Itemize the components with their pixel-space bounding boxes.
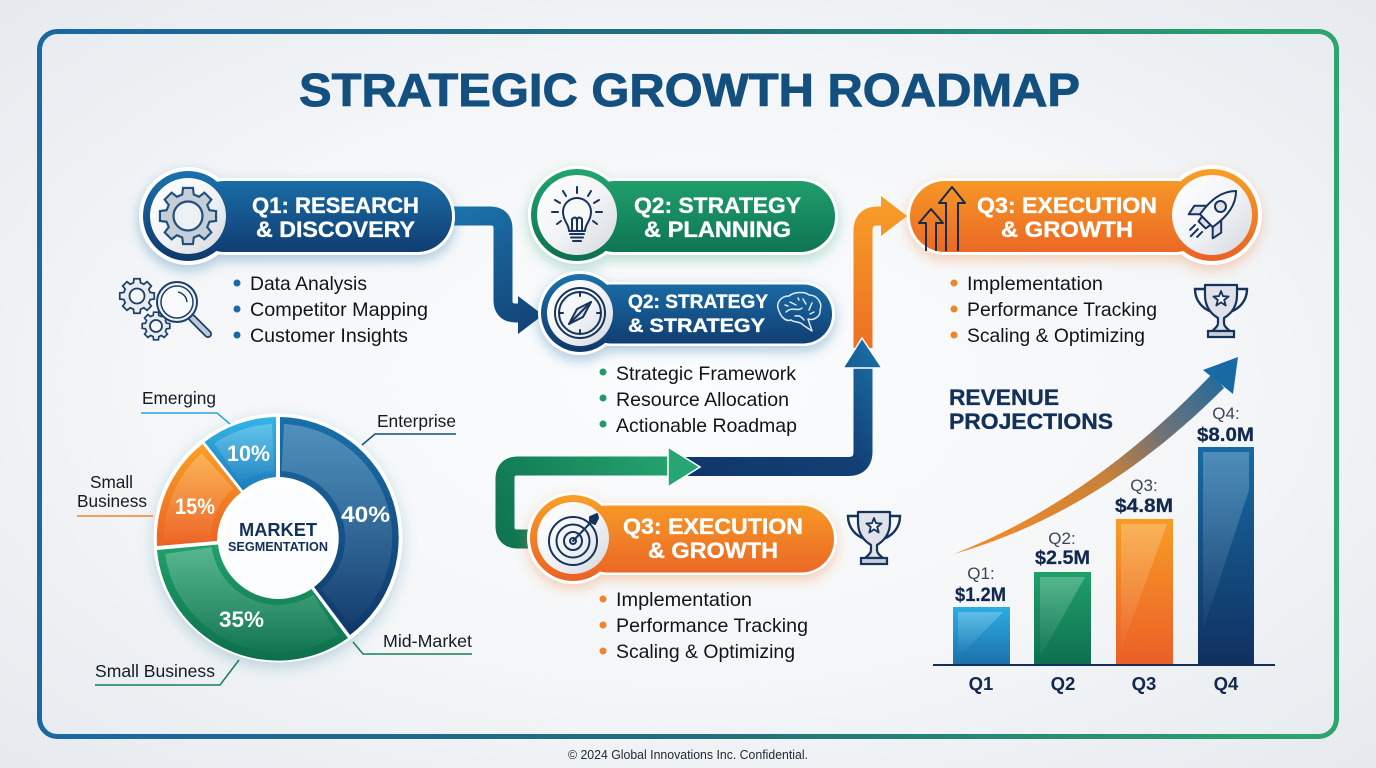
pill fill: Q2 strategy xyxy=(541,274,832,352)
segment: small business 15% xyxy=(157,444,241,546)
icon: rocket xyxy=(1177,178,1249,250)
bullet list: Q2: Actionable Roadmap xyxy=(616,415,797,437)
heading: Q3 right xyxy=(977,193,1157,242)
panel: Q3 execution, centre column xyxy=(527,492,900,663)
centre label: MARKET xyxy=(239,520,317,540)
percentages: 10% xyxy=(227,441,270,466)
pill fill: Q1 xyxy=(143,171,452,261)
pill fill: Q3 right xyxy=(910,169,1258,261)
label: Mid-Market: Mid-Market xyxy=(383,631,472,651)
pill fill: Q3 centre xyxy=(530,495,834,581)
heading: Q3 right: Q3: EXECUTION xyxy=(977,193,1157,218)
bullet list: Q3 right: Scaling & Optimizing xyxy=(967,325,1145,347)
panel: Q1 research and discovery xyxy=(120,167,455,347)
footer copyright: © 2024 Global Innovations Inc. Confidential. xyxy=(568,748,808,762)
label: Emerging xyxy=(141,388,230,424)
panel: Q2 strategy and planning pill xyxy=(528,166,838,264)
donut hole xyxy=(222,485,334,597)
heading: Q2 strategy xyxy=(628,291,768,337)
axis labels: Q1 xyxy=(969,673,993,694)
pill outline: Q3 centre xyxy=(527,492,837,584)
heading: Q2 strategy: Q2: STRATEGY xyxy=(628,291,768,313)
percentages xyxy=(175,441,390,632)
icon: growth arrows xyxy=(919,187,965,251)
label: Small Business orange xyxy=(77,472,153,516)
axis labels xyxy=(969,673,1239,694)
label: Mid-Market xyxy=(353,631,472,654)
pill outline: Q2 strategy xyxy=(538,271,835,355)
bullet list: Q3 centre: Scaling & Optimizing xyxy=(616,641,795,663)
bar: Q2 xyxy=(1034,529,1091,665)
percentages: 15% xyxy=(175,494,215,519)
arrow: navy rising connector xyxy=(685,338,882,466)
segment highlights xyxy=(164,424,392,652)
arrow: Q1 to Q2 xyxy=(450,216,543,334)
axis labels: Q3 xyxy=(1132,673,1156,694)
icon: trophy right xyxy=(1195,285,1247,337)
bullet list: Q1: Data Analysis xyxy=(250,273,367,295)
heading: Q1 xyxy=(252,193,419,242)
bullet list: Q3 right: Implementation xyxy=(967,273,1103,295)
label: Enterprise: Enterprise xyxy=(377,411,456,431)
chart heading xyxy=(949,385,1113,434)
segment: emerging 10% xyxy=(204,417,276,490)
bullet list: Q1 xyxy=(234,273,428,347)
icon: compass xyxy=(555,288,605,338)
pill fill: Q2 planning xyxy=(531,169,835,261)
bullet list: Q3 centre: Implementation xyxy=(616,589,752,611)
bar: Q3: $4.8M xyxy=(1115,496,1173,517)
bullet list: Q2: Strategic Framework xyxy=(616,363,796,385)
centre label: SEGMENTATION xyxy=(228,540,328,554)
segment: enterprise 40% xyxy=(280,417,399,635)
heading: Q1: Q1: RESEARCH xyxy=(252,193,419,218)
bar: Q4 xyxy=(1197,404,1254,665)
bullet list: Q3 right xyxy=(950,273,1157,347)
heading: Q2 strategy: & STRATEGY xyxy=(628,315,765,337)
bar: Q3 xyxy=(1115,476,1173,665)
heading: Q3 centre: Q3: EXECUTION xyxy=(623,514,803,539)
bullet list: Q1: Competitor Mapping xyxy=(250,299,428,321)
label: Small Business orange: Small xyxy=(90,472,133,492)
chart heading: REVENUE xyxy=(949,385,1059,410)
percentages: 35% xyxy=(219,607,264,632)
chart heading: PROJECTIONS xyxy=(949,409,1113,434)
bar: Q4: Q4: xyxy=(1212,404,1240,423)
icon: light bulb xyxy=(552,187,602,241)
bar: Q1 xyxy=(953,564,1010,665)
bullet list: Q2 xyxy=(600,363,797,437)
label: Small Business green xyxy=(95,660,239,685)
axis labels: Q4 xyxy=(1214,673,1239,694)
bullet list: Q3 centre: Performance Tracking xyxy=(616,615,808,637)
bullet list: Q3 centre xyxy=(600,589,808,663)
title: STRATEGIC GROWTH ROADMAP xyxy=(299,64,1080,116)
label: Emerging: Emerging xyxy=(142,388,216,408)
arrow: green connector xyxy=(505,447,700,539)
heading: Q3 centre xyxy=(623,514,803,563)
donut chart: market segmentation xyxy=(77,388,472,685)
icon: trophy centre xyxy=(848,512,900,564)
arrow: orange up to Q3 execution xyxy=(863,196,907,348)
growth swoosh arrow xyxy=(954,357,1238,554)
label: Small Business green: Small Business xyxy=(95,661,215,681)
bar: Q1: Q1: xyxy=(967,564,995,583)
icon: target with arrow xyxy=(549,514,598,565)
bar chart: revenue projections xyxy=(933,357,1275,694)
heading: Q1: & DISCOVERY xyxy=(256,217,415,242)
percentages: 40% xyxy=(341,502,390,527)
bar: Q3: Q3: xyxy=(1130,476,1158,495)
centre label xyxy=(228,520,328,554)
heading: Q2 planning: Q2: STRATEGY xyxy=(634,193,801,218)
heading: Q2 planning xyxy=(634,193,801,242)
bar: Q2: Q2: xyxy=(1048,529,1076,548)
bar: Q1: $1.2M xyxy=(955,585,1006,606)
icon: brain xyxy=(778,292,821,331)
pill: Q1 white outline xyxy=(139,167,455,265)
bar: Q4: $8.0M xyxy=(1197,425,1254,446)
pill outline: Q3 right xyxy=(907,165,1262,265)
label: Small Business orange: Business xyxy=(77,491,147,511)
heading: Q3 right: & GROWTH xyxy=(1001,217,1133,242)
axis labels: Q2 xyxy=(1051,673,1075,694)
label: Enterprise xyxy=(362,411,456,445)
bullet list: Q1: Customer Insights xyxy=(250,325,408,347)
donut base with shadow xyxy=(154,414,402,662)
heading: Q3 centre: & GROWTH xyxy=(648,538,778,563)
panel: Q2 strategy xyxy=(538,271,835,437)
bullet list: Q2: Resource Allocation xyxy=(616,389,789,411)
bar: Q2: $2.5M xyxy=(1035,548,1090,569)
icon: gear xyxy=(160,188,216,244)
heading: Q2 planning: & PLANNING xyxy=(644,217,791,242)
bullet list: Q3 right: Performance Tracking xyxy=(967,299,1157,321)
pill outline: Q2 planning xyxy=(528,166,838,264)
axis line xyxy=(933,664,1275,666)
icon: gears and magnifier xyxy=(120,279,208,340)
segment: mid-market 35% xyxy=(157,544,348,661)
panel: Q3 execution, right column xyxy=(907,165,1262,347)
